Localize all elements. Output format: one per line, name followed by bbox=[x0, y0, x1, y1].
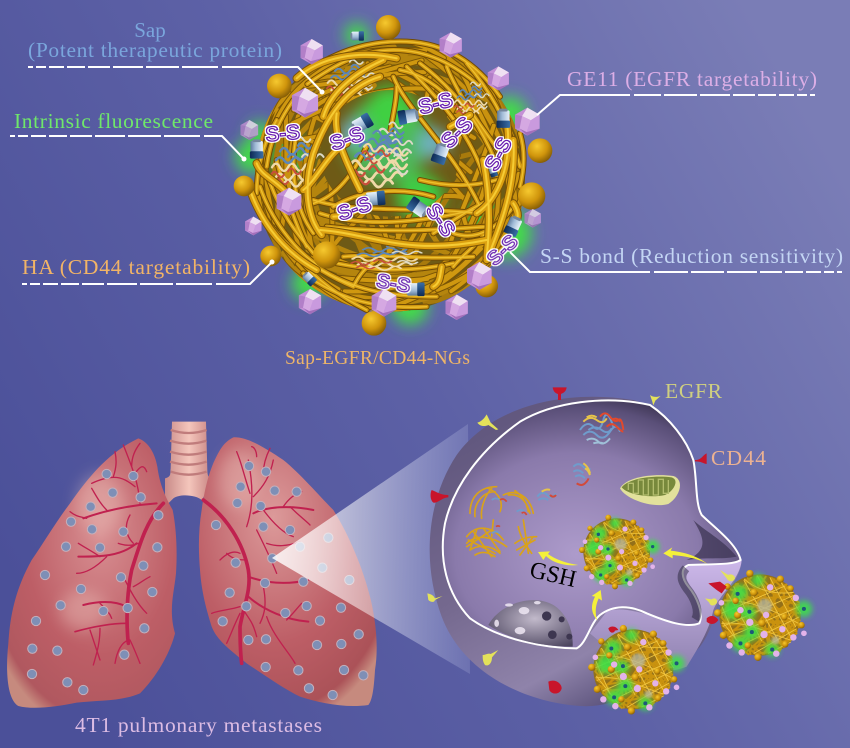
label: CD44: CD44 bbox=[711, 446, 766, 470]
nanogel inside cell bbox=[573, 508, 661, 596]
trachea bbox=[165, 422, 213, 507]
label: Intrinsic fluorescence: Intrinsic fluorescence bbox=[14, 109, 213, 133]
metastasis dots bbox=[27, 461, 368, 700]
label: Sap: (Potent therapeutic protein) bbox=[28, 38, 282, 62]
nanogel at bottom endosome bbox=[580, 616, 687, 722]
arrow into cell bbox=[663, 547, 707, 564]
arrow up from endosome bbox=[592, 590, 602, 621]
nanogel particle: Sap-EGFR/CD44-NGs bbox=[226, 14, 552, 336]
gold HA spheres bbox=[234, 15, 552, 336]
green fluorescence glow bbox=[235, 23, 532, 325]
particle core bbox=[255, 42, 525, 312]
mitochondrion bbox=[620, 475, 680, 505]
S-S disulfide labels: S-S bbox=[334, 192, 375, 226]
released proteins bbox=[537, 413, 623, 500]
linker cylinders bbox=[250, 31, 524, 296]
disassembled nanogel fragments bbox=[467, 487, 537, 557]
S-S disulfide labels: S-S bbox=[375, 269, 412, 298]
protein clusters bbox=[271, 60, 489, 270]
nanogel approaching cell bbox=[706, 561, 814, 669]
dark fold at cup bbox=[687, 520, 737, 560]
S-S disulfide labels: S-S bbox=[437, 112, 477, 153]
label: EGFR: EGFR bbox=[665, 379, 723, 403]
tumor cell bbox=[427, 387, 814, 722]
front fibers bbox=[250, 55, 518, 287]
invagination membranes bbox=[590, 560, 742, 671]
left bronchial vessels bbox=[70, 443, 163, 665]
shaded rim on invagination bbox=[682, 568, 697, 619]
caption: 4T1 pulmonary metastases: 4T1 pulmonary metastases bbox=[75, 713, 322, 737]
cell interior with white cut line bbox=[443, 400, 741, 648]
GE11 icosahedra bbox=[241, 32, 541, 320]
interior green and blue glow bbox=[270, 87, 502, 238]
caption: Sap-EGFR/CD44-NGs: Sap-EGFR/CD44-NGs bbox=[285, 348, 470, 369]
fragment proteins bbox=[492, 498, 527, 533]
label: GE11 bbox=[537, 67, 817, 115]
lungs bbox=[7, 422, 377, 708]
S-S disulfide labels: S-S bbox=[265, 121, 301, 146]
EGFR receptors bbox=[427, 395, 735, 665]
left lung bbox=[7, 438, 177, 708]
back fibers bbox=[254, 38, 527, 313]
GSH label: GSH bbox=[527, 557, 579, 593]
right bronchial vessels bbox=[203, 447, 313, 663]
label: HA: HA (CD44 targetability) bbox=[22, 255, 250, 279]
magnification beam bbox=[272, 424, 470, 674]
S-S disulfide labels: S-S bbox=[421, 200, 460, 241]
cell outer shell bbox=[430, 397, 742, 706]
label: Sap: Sap bbox=[134, 18, 166, 42]
S-S disulfide labels: S-S bbox=[480, 134, 517, 175]
label: GE11: GE11 (EGFR targetability) bbox=[567, 67, 817, 91]
S-S disulfide labels: S-S bbox=[416, 88, 455, 119]
label: Intrinsic fluorescence bbox=[10, 109, 246, 162]
S-S disulfide labels: S-S bbox=[327, 122, 367, 156]
label: S-S bond: S-S bond (Reduction sensitivity) bbox=[540, 244, 843, 268]
S-S disulfide labels bbox=[265, 88, 523, 298]
label: Sap bbox=[28, 18, 324, 94]
GSH arrow bbox=[538, 551, 578, 565]
right lung bbox=[199, 437, 377, 706]
CD44 receptors bbox=[431, 387, 727, 694]
lysosome dome bbox=[488, 600, 573, 647]
S-S disulfide labels: S-S bbox=[482, 230, 523, 271]
lung highlights bbox=[60, 450, 262, 630]
